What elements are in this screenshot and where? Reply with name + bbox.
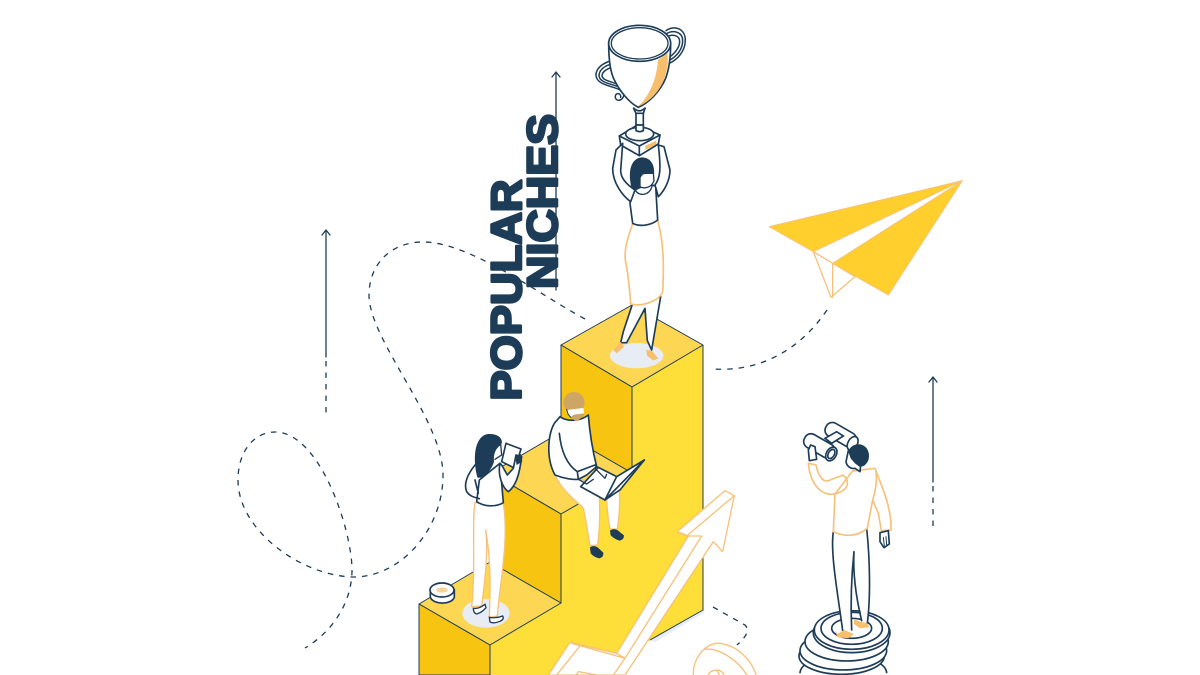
title line 1: POPULAR xyxy=(483,179,531,400)
sweater xyxy=(808,463,891,535)
hair xyxy=(630,157,654,189)
tablet xyxy=(502,443,521,468)
skirt xyxy=(625,220,663,305)
arms xyxy=(613,143,635,202)
arrow: right upward xyxy=(929,377,937,527)
right face xyxy=(490,345,703,675)
head xyxy=(563,392,585,413)
face xyxy=(640,173,654,188)
laptop xyxy=(581,460,644,500)
title line 2: NICHES xyxy=(519,114,567,289)
paper plane xyxy=(769,181,962,297)
torso xyxy=(477,463,503,506)
man with binoculars xyxy=(801,420,891,638)
binoculars xyxy=(801,420,860,463)
title: POPULAR NICHES xyxy=(483,114,567,400)
staircase podium xyxy=(419,305,705,675)
shadow xyxy=(462,599,510,628)
growth arrow xyxy=(548,491,734,675)
legs xyxy=(621,297,661,350)
face xyxy=(491,443,502,459)
spiral coin xyxy=(693,643,756,675)
trophy stem xyxy=(636,112,643,128)
top step xyxy=(561,305,703,387)
torso xyxy=(630,185,658,225)
feet xyxy=(835,630,854,638)
bottom step xyxy=(419,562,561,645)
arrow: left upward xyxy=(322,230,330,414)
arrow: centre upward xyxy=(552,72,560,290)
shoes xyxy=(473,604,486,614)
feet xyxy=(614,343,623,353)
binocular hand xyxy=(808,445,817,461)
dashed path from paper plane xyxy=(713,310,827,369)
dashed path near coins xyxy=(713,607,747,645)
face xyxy=(846,451,862,472)
woman with tablet xyxy=(462,434,522,628)
woman holding trophy xyxy=(610,143,670,368)
small bowl xyxy=(430,583,454,603)
trophy cup xyxy=(609,43,671,107)
shoes xyxy=(590,546,603,558)
trophy xyxy=(596,25,685,156)
hair xyxy=(848,444,869,467)
trophy handles xyxy=(666,28,685,63)
coin stack xyxy=(799,611,890,674)
back arm xyxy=(466,465,479,499)
middle step xyxy=(491,432,632,514)
hair xyxy=(475,434,502,478)
block shadow xyxy=(648,606,705,642)
trousers xyxy=(472,503,505,617)
man on laptop xyxy=(549,392,644,558)
trophy base xyxy=(619,125,660,156)
hand xyxy=(880,531,889,548)
trousers xyxy=(555,475,620,546)
front arm xyxy=(499,455,522,492)
shadow xyxy=(610,343,663,368)
dashed flight path loop xyxy=(238,242,585,648)
hands xyxy=(578,468,607,484)
trousers xyxy=(833,528,869,631)
sweater xyxy=(549,415,597,479)
